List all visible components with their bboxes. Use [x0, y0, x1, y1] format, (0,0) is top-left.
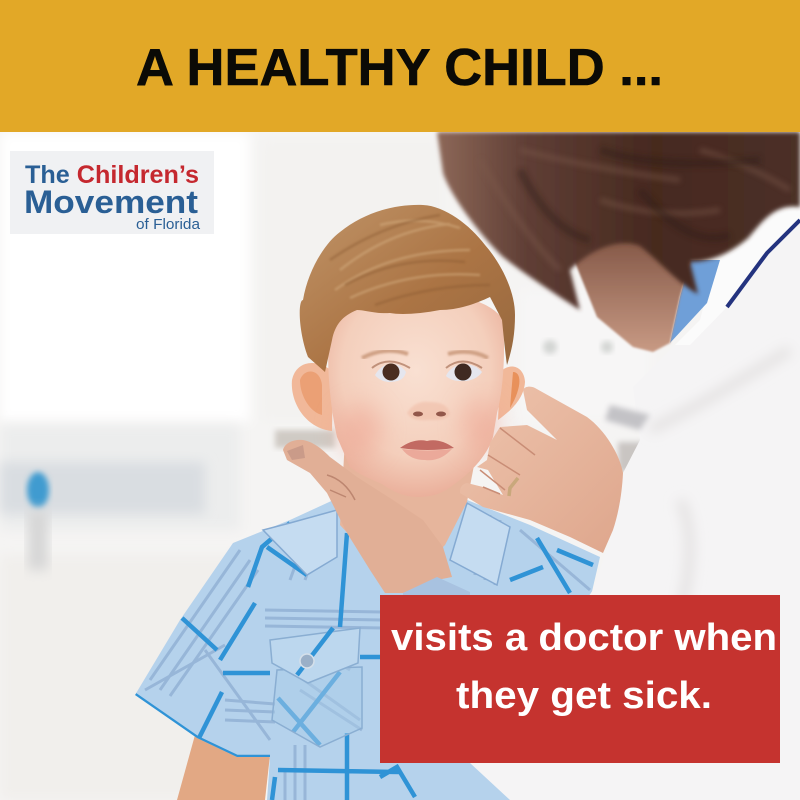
logo: The Children's Movement of Florida	[10, 151, 214, 234]
logo line 3: of Florida	[136, 216, 201, 233]
wedding ring	[509, 478, 518, 496]
doctor's right hand	[460, 387, 623, 553]
child's cheeks	[338, 399, 498, 456]
child's neck	[340, 440, 475, 590]
child's face	[328, 294, 504, 497]
callout line 2: they get sick.	[456, 675, 712, 717]
doctor's hair	[437, 132, 800, 310]
logo line 2: Movement	[24, 184, 198, 220]
child's shirt	[135, 497, 600, 800]
callout line 1: visits a doctor when	[391, 617, 777, 659]
bright plaid	[135, 523, 593, 800]
pale plaid	[145, 510, 590, 800]
child's hair	[300, 205, 515, 372]
shirt pocket	[270, 628, 362, 747]
callout: red box	[380, 595, 780, 763]
doctor's white coat	[470, 207, 800, 800]
child's arm	[177, 735, 270, 800]
stethoscope line	[727, 220, 800, 307]
logo line 1: The Children’s	[25, 161, 199, 189]
child's mouth	[400, 440, 454, 460]
doctor's sleeve cuff	[403, 577, 470, 597]
title: A HEALTHY CHILD ...	[136, 39, 663, 97]
doctor's left hand	[283, 440, 452, 593]
child's nose	[407, 402, 450, 420]
coat collar	[675, 207, 800, 345]
child's ears	[292, 363, 525, 431]
doctor's blue shirt	[670, 260, 720, 343]
child's eyes	[362, 351, 488, 382]
doctor's neck and face	[560, 225, 690, 352]
shirt collar	[263, 503, 510, 585]
title banner	[0, 0, 800, 132]
